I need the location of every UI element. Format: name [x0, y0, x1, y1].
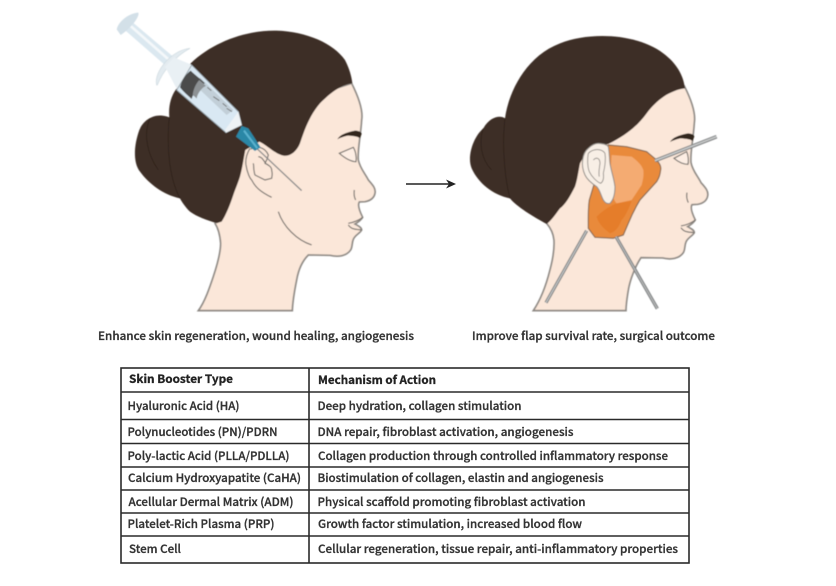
hair and bun [470, 36, 685, 224]
row: CaHA: Biostimulation of collagen, elastin and angiogenesis [318, 470, 604, 486]
bun fold lines [147, 117, 180, 198]
syringe [117, 13, 261, 151]
flange [156, 48, 190, 85]
row: stem cell: Cellular regeneration, tissue repair, anti-inflammatory properties [318, 541, 678, 557]
eyebrow [337, 131, 362, 139]
barrel tip [225, 112, 242, 133]
row: PRP: Platelet-Rich Plasma (PRP) [128, 516, 274, 532]
injection needle line [257, 148, 302, 191]
row: HA: Deep hydration, collagen stimulation [318, 398, 522, 414]
row: CaHA [128, 470, 604, 486]
face and neck skin [533, 86, 708, 311]
retractor: lower right [616, 237, 657, 309]
inner ear [588, 150, 605, 183]
ear [582, 143, 615, 203]
caption: left: Enhance skin regeneration, wound healing, angiogenesis [98, 328, 414, 344]
jaw line [278, 212, 312, 245]
scale ticks [207, 87, 232, 112]
row: PLLA [128, 448, 668, 464]
row: PN/PDRN: DNA repair, fibroblast activation, angiogenesis [318, 424, 574, 440]
arrow between illustrations [406, 180, 456, 188]
caption: right: Improve flap survival rate, surgical outcome [472, 328, 715, 344]
nose and lip lines [348, 190, 363, 230]
ear [246, 147, 272, 197]
table: skin booster types and mechanisms [121, 368, 689, 563]
row: PN/PDRN [128, 424, 574, 440]
stopper [180, 71, 205, 99]
row: PLLA: Collagen production through controlled inflammatory response [318, 448, 668, 464]
exposed flap tissue [588, 145, 661, 238]
header row [129, 371, 436, 388]
hair and bun [135, 31, 352, 223]
nose and lip lines [681, 193, 695, 233]
row: ADM [128, 494, 586, 510]
header row: Skin Booster Type [129, 371, 233, 387]
row: PRP: Growth factor stimulation, increased blood flow [318, 516, 582, 532]
row: PLLA: Poly-lactic Acid (PLLA/PDLLA) [128, 448, 290, 464]
row: ADM: Physical scaffold promoting fibroblast activation [318, 494, 586, 510]
row: stem cell [129, 541, 678, 557]
bun fold lines [481, 118, 510, 198]
table grid [121, 368, 689, 563]
fluid grey top [195, 77, 233, 115]
retractor: lower left [546, 231, 587, 303]
row: ADM: Acellular Dermal Matrix (ADM) [128, 494, 294, 510]
flap inner layer [611, 155, 643, 203]
eyebrow [670, 133, 694, 142]
barrel [177, 65, 242, 133]
row: CaHA: Calcium Hydroxyapatite (CaHA) [128, 470, 301, 486]
row: HA: Hyaluronic Acid (HA) [128, 398, 240, 414]
row: PN/PDRN: Polynucleotides (PN)/PDRN [128, 424, 278, 440]
flap lower layer [597, 201, 632, 233]
retractor: upper right [655, 137, 717, 161]
collar [165, 57, 192, 90]
plunger disc [117, 13, 139, 35]
face and neck skin [198, 83, 375, 311]
eye [674, 152, 688, 164]
row: HA [128, 398, 522, 414]
plunger rod [124, 21, 174, 66]
illustration: flap surgery [470, 36, 717, 311]
eye [339, 147, 356, 162]
row: stem cell: Stem Cell [129, 541, 182, 557]
row: PRP [128, 516, 582, 532]
header row: Mechanism of Action [318, 372, 436, 388]
illustration: injection into the face [117, 13, 375, 311]
blue hub [236, 126, 261, 151]
